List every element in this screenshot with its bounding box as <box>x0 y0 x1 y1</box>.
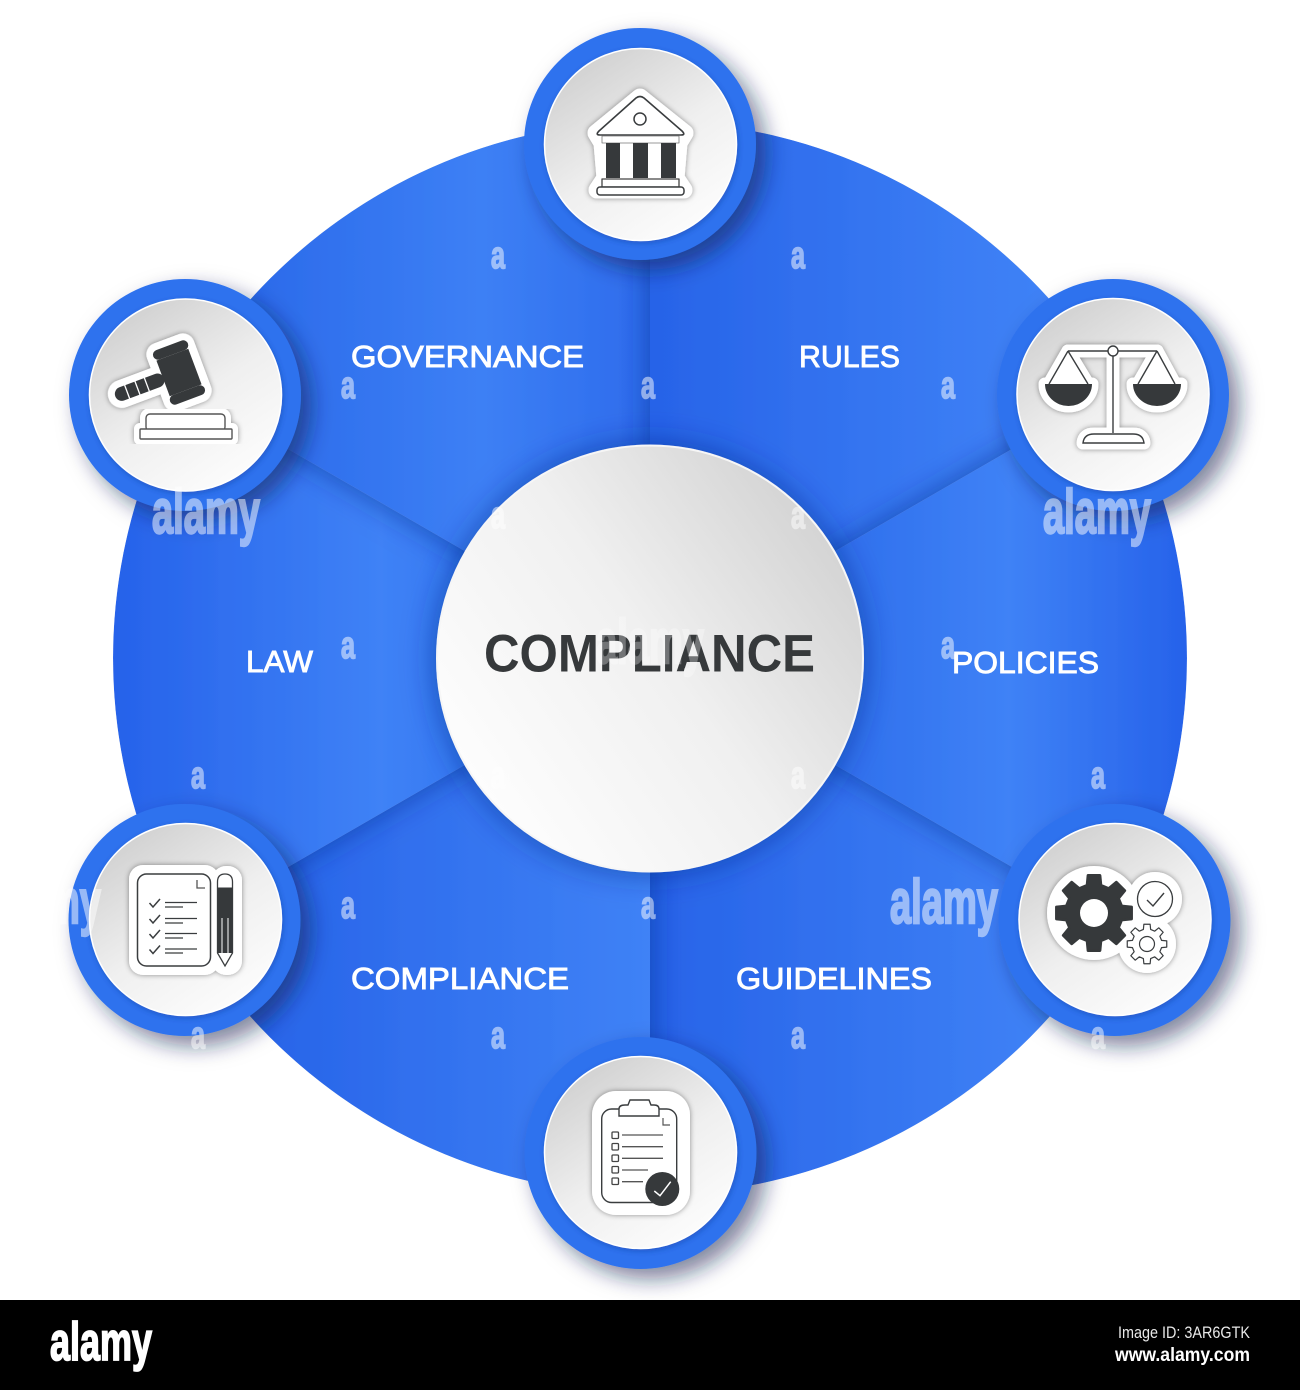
centre title: COMPLIANCE <box>484 624 815 684</box>
watermark: a <box>491 1015 506 1057</box>
label: policies: POLICIES <box>952 645 1099 680</box>
watermark: alamy <box>596 608 704 677</box>
icon: clipboard with check badge <box>592 1091 690 1215</box>
segment labels <box>246 339 1099 996</box>
watermark <box>0 235 1151 1057</box>
segment: governance <box>250 136 650 562</box>
node: gavel icon, upper left <box>69 279 301 511</box>
watermark: a <box>941 625 956 667</box>
label: compliance: COMPLIANCE <box>351 961 569 996</box>
watermark: a <box>341 885 356 927</box>
segment: rules <box>635 132 1049 551</box>
node: scales icon, upper right <box>997 279 1229 511</box>
segment: compliance <box>250 765 665 1181</box>
watermark: a <box>641 885 656 927</box>
icon: balance scales <box>1045 346 1181 443</box>
label: governance: GOVERNANCE <box>351 339 584 374</box>
footer logo: alamy <box>50 1312 152 1372</box>
image id: Image ID: 3AR6GTK <box>1118 1323 1251 1342</box>
segment: law <box>113 449 470 877</box>
node: clipboard icon, bottom <box>524 1037 756 1269</box>
label: law: LAW <box>246 644 314 679</box>
watermark: a <box>791 495 806 537</box>
watermark: a <box>491 235 506 277</box>
icon: checklist and pencil <box>129 865 242 975</box>
watermark: a <box>1091 1015 1106 1057</box>
icon: bank building <box>596 96 685 195</box>
watermark: a <box>941 365 956 407</box>
icon: gavel <box>105 339 232 439</box>
watermark: a <box>491 755 506 797</box>
node: bank icon, top <box>524 28 756 260</box>
watermark: a <box>341 625 356 667</box>
segment: policies <box>829 436 1187 882</box>
node: checklist and pencil icon, lower left <box>68 804 300 1036</box>
watermark: alamy <box>890 868 998 937</box>
watermark: a <box>191 755 206 797</box>
segment: guidelines <box>650 765 1050 1186</box>
centre circle <box>437 446 863 872</box>
footer bar <box>0 1300 1300 1390</box>
icon: gears and check <box>1047 866 1182 973</box>
watermark: alamy <box>152 478 260 547</box>
watermark: a <box>191 1015 206 1057</box>
label: guidelines: GUIDELINES <box>736 961 932 996</box>
label: rules: RULES <box>799 339 900 374</box>
watermark: a <box>791 755 806 797</box>
segmented blue wheel <box>113 121 1187 1195</box>
node: gears icon, lower right <box>998 804 1230 1036</box>
watermark: a <box>491 495 506 537</box>
watermark: a <box>791 235 806 277</box>
watermark: a <box>341 365 356 407</box>
watermark: alamy <box>1043 478 1151 547</box>
watermark: a <box>641 365 656 407</box>
website: www.alamy.com <box>1114 1345 1250 1366</box>
watermark: a <box>1091 755 1106 797</box>
watermark: a <box>791 1015 806 1057</box>
